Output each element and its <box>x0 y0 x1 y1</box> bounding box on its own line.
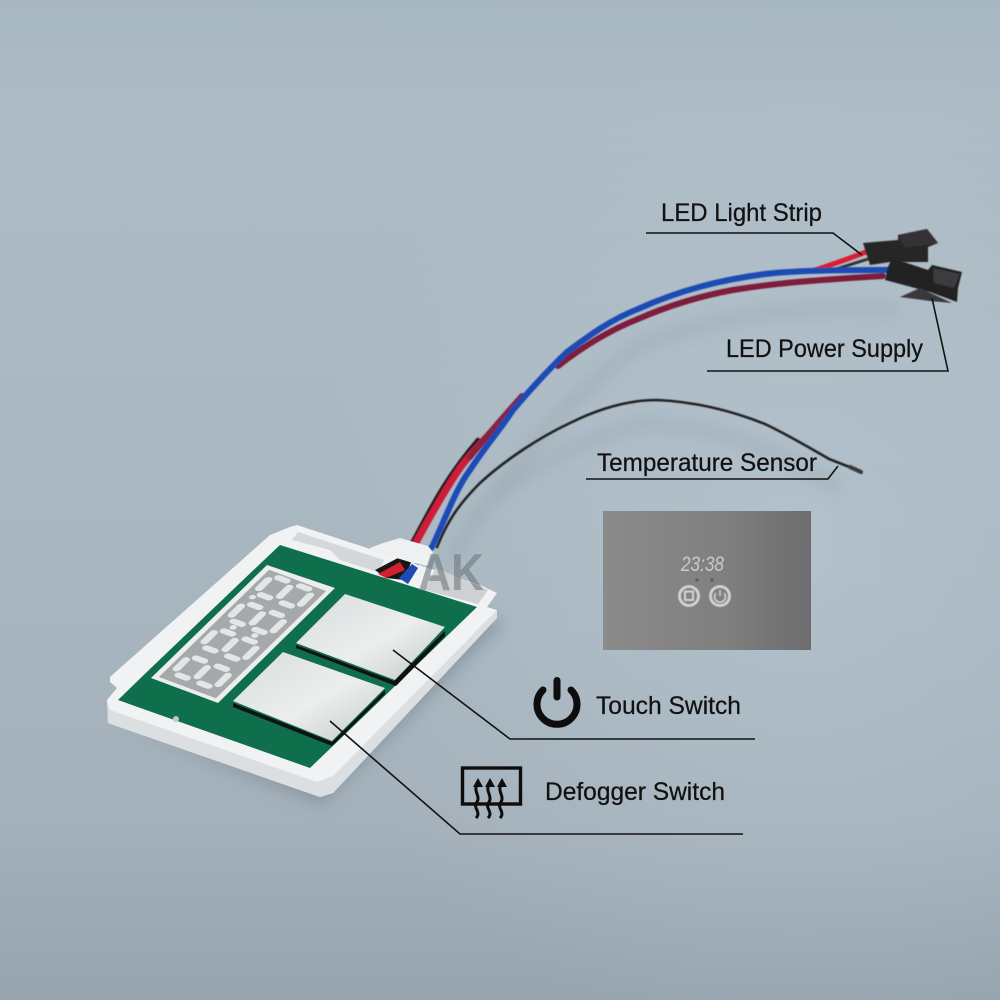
green circuit board <box>118 545 477 768</box>
inset power button <box>710 586 730 606</box>
icon: power <box>537 680 577 724</box>
inset defog button <box>680 586 698 606</box>
wiring harness <box>405 252 888 580</box>
digit 2 <box>200 629 260 661</box>
digit 3 <box>228 602 287 635</box>
sensor wire: temperature sensor <box>437 400 861 547</box>
cable shadow <box>450 309 900 560</box>
board shadow <box>115 610 505 805</box>
callout: LED Power Supply: LED Power Supply <box>726 335 923 363</box>
callout: Defogger Switch: Defogger Switch <box>545 778 725 806</box>
callout: LED Light Strip <box>646 199 862 255</box>
board housing <box>107 525 497 797</box>
cable clip <box>370 538 433 566</box>
inset clock: 23:38 <box>680 553 724 576</box>
callout: Defogger Switch <box>330 721 743 834</box>
callout: LED Light Strip: LED Light Strip <box>661 199 822 227</box>
touch pad: defogger <box>233 652 385 746</box>
connector: LED power supply <box>885 258 962 303</box>
callout: Touch Switch: Touch Switch <box>596 692 741 720</box>
solder point <box>173 716 179 722</box>
watermark: AK <box>418 544 484 602</box>
digit 1 <box>173 656 232 688</box>
control board <box>107 525 505 805</box>
callout: Touch Switch <box>393 650 755 739</box>
inset indicator dots <box>695 578 714 582</box>
connector: LED light strip <box>863 229 938 265</box>
callout: Temperature Sensor: Temperature Sensor <box>597 449 817 477</box>
callout: LED Power Supply <box>707 298 948 371</box>
digit 4 <box>255 576 314 608</box>
icon: defogger <box>462 768 520 818</box>
wires under cable clip <box>375 558 412 580</box>
display inset photo <box>603 511 811 650</box>
LED clock display <box>151 565 335 703</box>
clock colon <box>220 594 288 639</box>
touch pad: power <box>296 594 445 686</box>
